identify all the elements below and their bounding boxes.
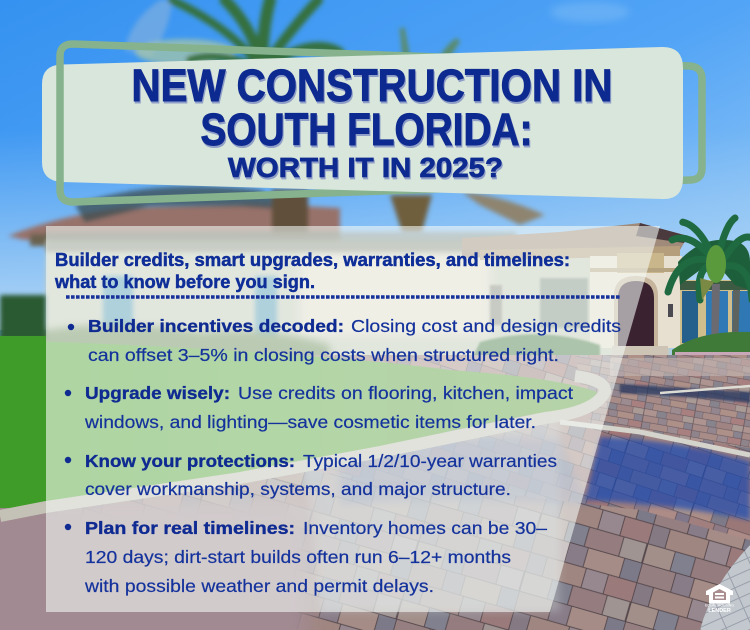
- green outline frame: [60, 44, 702, 202]
- title text: SOUTH FLORIDA:: [200, 104, 532, 155]
- bullet: know your protections: [65, 451, 557, 499]
- bullet: plan for real timelines: Inventory homes can be 30–: [303, 518, 547, 538]
- icon: equal housing lender: EQUAL HOUSING: [705, 604, 734, 608]
- paver driveway: [0, 355, 750, 630]
- icon: equal housing lender: LENDER: [708, 608, 731, 614]
- bullet: upgrade wisely: [65, 383, 573, 432]
- bullet: builder incentives: can offset 3–5% in closing costs when structured right.: [88, 345, 559, 365]
- palm trees, right: [668, 218, 750, 356]
- driveway shadows: [340, 384, 750, 520]
- bullet: builder incentives: Closing cost and design credits: [351, 316, 621, 336]
- right wing with blue windows: [680, 280, 750, 355]
- curb at lower right: [700, 545, 750, 630]
- bullet: plan for real timelines: [65, 518, 547, 596]
- bullet: upgrade wisely: Use credits on flooring, kitchen, impact: [238, 383, 573, 403]
- bullet: upgrade wisely: Upgrade wisely:: [85, 383, 230, 403]
- blurred fronds and trunks under the title: [75, 186, 545, 235]
- subheading: [54, 249, 570, 292]
- bullet: plan for real timelines: 120 days; dirt-start builds often run 6–12+ months: [85, 547, 511, 567]
- title banner: [42, 44, 702, 202]
- icon: equal housing lender: [705, 584, 734, 614]
- wavy divider: [66, 295, 620, 299]
- sky: [0, 0, 750, 360]
- bullet: builder incentives: Builder incentives decoded:: [88, 316, 344, 336]
- bullet: know your protections: Know your protections:: [85, 451, 295, 471]
- roof, right: [462, 223, 688, 260]
- front entry: [590, 253, 685, 356]
- frame left edge over banner: [56, 64, 64, 184]
- title text: WORTH IT IN 2025?: [228, 152, 503, 183]
- shrubs along the house: [0, 295, 750, 366]
- curbs along lawn and driveway: [0, 376, 750, 516]
- subheading: what to know before you sign.: [54, 271, 315, 292]
- blurred palm trees behind the title: [125, 0, 458, 70]
- subheading: Builder credits, smart upgrades, warranties, and timelines:: [55, 249, 570, 270]
- bullet: plan for real timelines: Plan for real timelines:: [85, 518, 295, 538]
- pale green banner shape: [42, 47, 683, 199]
- bullet: upgrade wisely: windows, and lighting—save cosmetic items for later.: [84, 412, 536, 432]
- blurred roof, left: [8, 203, 340, 246]
- title text: NEW CONSTRUCTION IN: [132, 60, 612, 111]
- title text: [132, 60, 612, 183]
- translucent text panel: [46, 226, 660, 612]
- bullet: plan for real timelines: with possible weather and permit delays.: [84, 576, 434, 596]
- lawn: [0, 336, 597, 508]
- house walls: [46, 232, 670, 360]
- bullet: know your protections: cover workmanship, systems, and major structure.: [85, 479, 511, 499]
- bullet: know your protections: Typical 1/2/10-year warranties: [303, 451, 557, 471]
- bullet: builder incentives: [68, 316, 621, 365]
